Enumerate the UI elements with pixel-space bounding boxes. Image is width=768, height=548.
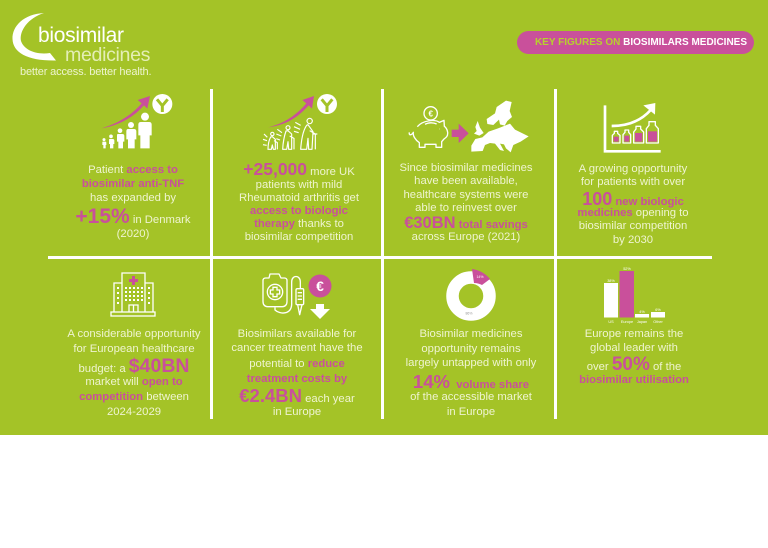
text: patient access: (2020) (117, 228, 149, 240)
text: budget: market will open to (85, 376, 183, 388)
text: opportunity: for patients with over (581, 176, 685, 188)
text: global leader: biosimilar utilisation (579, 374, 689, 386)
panel: patient access anti-TNF (75, 94, 191, 240)
logo tagline: better access. better health. (20, 66, 151, 78)
text: opportunity: medicines opening to (577, 207, 689, 219)
stat: +25,000: +25,000 more UK (243, 159, 355, 179)
text: UK patients: access to biologic (250, 205, 348, 217)
text: opportunity (577, 163, 689, 246)
text: UK patients (239, 159, 359, 243)
icon: donut chart: 86% (465, 312, 473, 316)
logo wordmark top: biosimilar (38, 24, 124, 47)
text: savings: across Europe (2021) (412, 231, 520, 243)
text: cancer treatment: in Europe (273, 406, 321, 418)
text: budget: A considerable opportunity (67, 328, 201, 340)
green background (0, 0, 768, 435)
text: cancer treatment: treatment costs by (247, 373, 347, 385)
panel: cancer treatment (231, 273, 363, 418)
text: patient access: Patient access to (88, 164, 178, 176)
text: cancer treatment (231, 328, 363, 418)
title pill (517, 31, 754, 54)
text: global leader: global leader with (590, 342, 678, 354)
bar chart: utilisation by region: Japan (637, 320, 647, 324)
logo crescent (12, 13, 56, 60)
text: cancer treatment: Biosimilars available for (238, 328, 356, 340)
icon: piggy bank, arrow and Europe map (408, 100, 529, 152)
bar chart: utilisation by region: 4% (639, 310, 645, 314)
text: budget (67, 328, 201, 418)
text: UK patients: patients with mild (256, 179, 342, 191)
text: volume share: opportunity remains (421, 343, 521, 355)
icon: chart with rising vials (604, 103, 661, 153)
text: budget: 2024-2029 (107, 406, 161, 418)
text: savings: have been available, (414, 175, 518, 187)
text: UK patients: biosimilar competition (245, 231, 353, 243)
stat: 50%: over 50% of the (587, 354, 681, 375)
icon: piggy bank, arrow and Europe map: € (428, 109, 433, 118)
text: savings: healthcare systems were (404, 189, 528, 201)
text: budget: for European healthcare (73, 343, 195, 355)
bar chart: utilisation by region: US (608, 320, 614, 324)
text: volume share (406, 328, 536, 418)
text: UK patients: therapy thanks to (254, 218, 344, 230)
icon: growing people with antibody (102, 94, 172, 148)
text: volume share: in Europe (447, 406, 495, 418)
text: opportunity: by 2030 (613, 234, 653, 246)
icon: donut chart (446, 269, 496, 321)
bar chart: utilisation by region: 52% (623, 267, 631, 271)
bar chart: utilisation by region: 38% (607, 279, 615, 283)
icon: donut chart: 14% (476, 275, 484, 279)
text: volume share: 14% volume share (413, 371, 529, 392)
stat: €2.4BN: €2.4BN each year (239, 385, 355, 406)
title pill: KEY FIGURES ON BIOSIMILARS MEDICINES (535, 37, 747, 48)
bar chart: utilisation by region: Other (653, 320, 663, 324)
panel: total savings (399, 100, 533, 243)
text: global leader: Europe remains the (585, 328, 683, 340)
logo wordmark bottom: medicines (65, 44, 150, 66)
panel: growing opportunity (577, 103, 689, 246)
text: savings: €30BN total savings (404, 214, 528, 232)
text: opportunity: 100 new biologic (582, 189, 684, 209)
bar chart: utilisation by region: 6% (655, 308, 661, 312)
text: cancer treatment: cancer treatment have the (231, 342, 363, 354)
text: patient access: biosimilar anti-TNF (82, 178, 184, 190)
text: volume share: of the accessible market (410, 391, 532, 403)
stat: $40BN: budget: a $40BN (79, 355, 189, 377)
logo: biosimilar medicines (12, 13, 151, 78)
text: savings: able to reinvest over (415, 202, 517, 214)
text: global leader (579, 328, 689, 386)
text: UK patients: Rheumatoid arthritis get (239, 192, 359, 204)
text: savings (399, 162, 533, 243)
icon: elderly patients with antibody (262, 94, 337, 150)
panel: global leader (579, 267, 689, 386)
text: volume share: Biosimilar medicines (420, 328, 522, 340)
bar chart: utilisation by region: Europe (621, 320, 633, 324)
text: savings: Since biosimilar medicines (399, 162, 533, 174)
text: opportunity: biosimilar competition (579, 220, 687, 232)
panel: healthcare budget (67, 272, 201, 418)
icon: IV bag and falling cost (262, 273, 332, 319)
text: cancer treatment: potential to reduce (249, 358, 345, 370)
text: patient access: +15% in Denmark (75, 205, 191, 228)
bar chart: utilisation by region (604, 267, 665, 324)
panel: volume share (406, 269, 536, 418)
text: opportunity: A growing opportunity (579, 163, 687, 175)
panel: UK patients (239, 94, 359, 243)
icon: hospital (110, 272, 156, 317)
text: patient access: has expanded by (90, 192, 176, 204)
text: volume share: largely untapped with only (406, 357, 536, 369)
icon: IV bag and falling cost: € (316, 278, 324, 294)
text: patient access (75, 164, 191, 240)
text: budget: competition between (79, 391, 189, 403)
